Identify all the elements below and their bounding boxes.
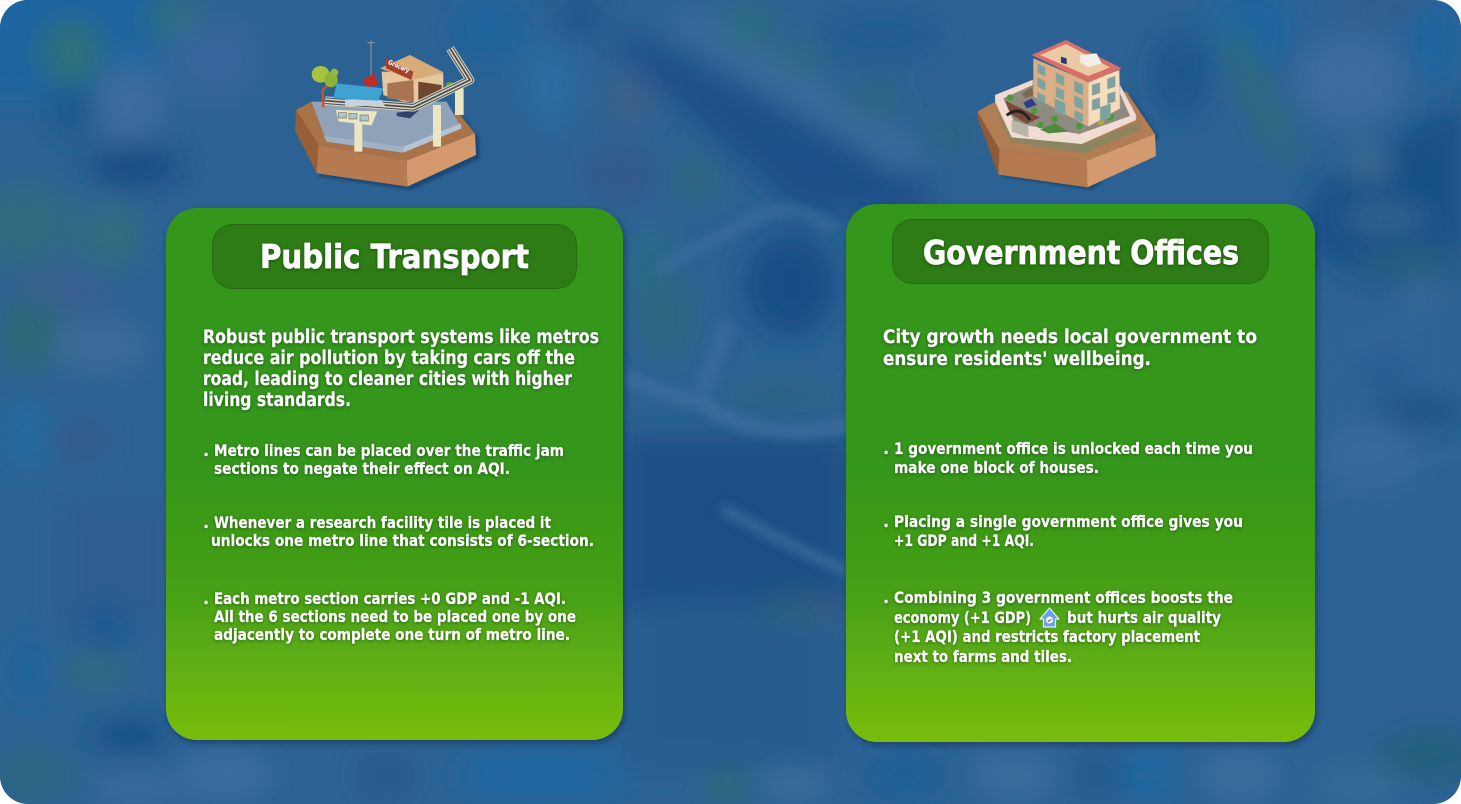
bullet: combining three offices: next to farms and tiles. <box>894 647 1072 666</box>
bullet: metro lines over traffic jams: Metro lines can be placed over the traffic jam <box>214 441 564 460</box>
bullet: combining three offices: economy (+1 GDP) <box>894 608 1031 627</box>
bullet: metro section values: Each metro section carries +0 GDP and -1 AQI. <box>214 589 566 608</box>
bullet: single office effect: Placing a single government office gives you <box>894 512 1243 531</box>
illustration: metro and grocery tile <box>295 41 480 190</box>
intro text: reduce air pollution by taking cars off the <box>203 348 575 369</box>
bullet: metro lines over traffic jams: sections to negate their effect on AQI. <box>214 459 510 478</box>
tile base <box>977 80 1156 187</box>
bullet: combining three offices: (+1 AQI) and restricts factory placement <box>894 627 1200 646</box>
bullet: combining three offices <box>883 588 1233 666</box>
intro text <box>203 327 599 411</box>
intro text <box>883 327 1257 370</box>
icon: blue house with check <box>1040 608 1059 627</box>
bullet: metro lines over traffic jams: . <box>203 441 209 460</box>
illustration: government office tile <box>977 40 1159 190</box>
bullet: single office effect: +1 GDP and +1 AQI. <box>894 531 1034 550</box>
bullet: metro section values: All the 6 sections need to be placed one by one <box>214 607 576 626</box>
heading: government offices: Government Offices <box>923 233 1239 272</box>
metro viaduct and station <box>325 48 470 152</box>
bullet: research facility unlocks metro <box>203 513 594 550</box>
bullet: metro section values <box>203 589 576 644</box>
bullet: combining three offices: Combining 3 government offices boosts the <box>894 588 1233 607</box>
bullet: metro section values: adjacently to complete one turn of metro line. <box>214 625 570 644</box>
bullet: single office effect: . <box>883 512 889 531</box>
intro text: ensure residents' wellbeing. <box>883 349 1151 370</box>
bullet: combining three offices: but hurts air quality <box>1067 608 1221 627</box>
bullet: research facility unlocks metro: unlocks one metro line that consists of 6-section. <box>211 531 594 550</box>
intro text: Robust public transport systems like metros <box>203 327 599 348</box>
bullet: metro lines over traffic jams <box>203 441 564 478</box>
intro text: living standards. <box>203 390 351 411</box>
bullet: combining three offices: . <box>883 588 889 607</box>
bullet: research facility unlocks metro: Whenever a research facility tile is placed it <box>214 513 551 532</box>
grocery shop <box>363 55 455 118</box>
courtyard wall and garden <box>995 80 1136 144</box>
heading: public transport <box>212 224 576 288</box>
heading: government offices <box>892 220 1268 284</box>
bullet: research facility unlocks metro: . <box>203 513 209 532</box>
bullet: unlocking an office: 1 government office is unlocked each time you <box>894 439 1253 458</box>
intro text: road, leading to cleaner cities with higher <box>203 369 573 390</box>
grocery shop: Grocery <box>387 59 411 75</box>
panel: government offices <box>846 204 1315 742</box>
bullet: metro section values: . <box>203 589 209 608</box>
heading: public transport: Public Transport <box>260 237 529 276</box>
office building <box>1032 40 1122 127</box>
bullet: unlocking an office: make one block of houses. <box>894 458 1099 477</box>
bullet: unlocking an office <box>883 439 1253 477</box>
panel: public transport <box>166 208 623 740</box>
tile base <box>295 102 476 187</box>
intro text: City growth needs local government to <box>883 327 1257 348</box>
tree <box>312 66 338 107</box>
bullet: unlocking an office: . <box>883 439 889 458</box>
bullet: single office effect <box>883 512 1243 550</box>
lamp post <box>367 41 375 80</box>
